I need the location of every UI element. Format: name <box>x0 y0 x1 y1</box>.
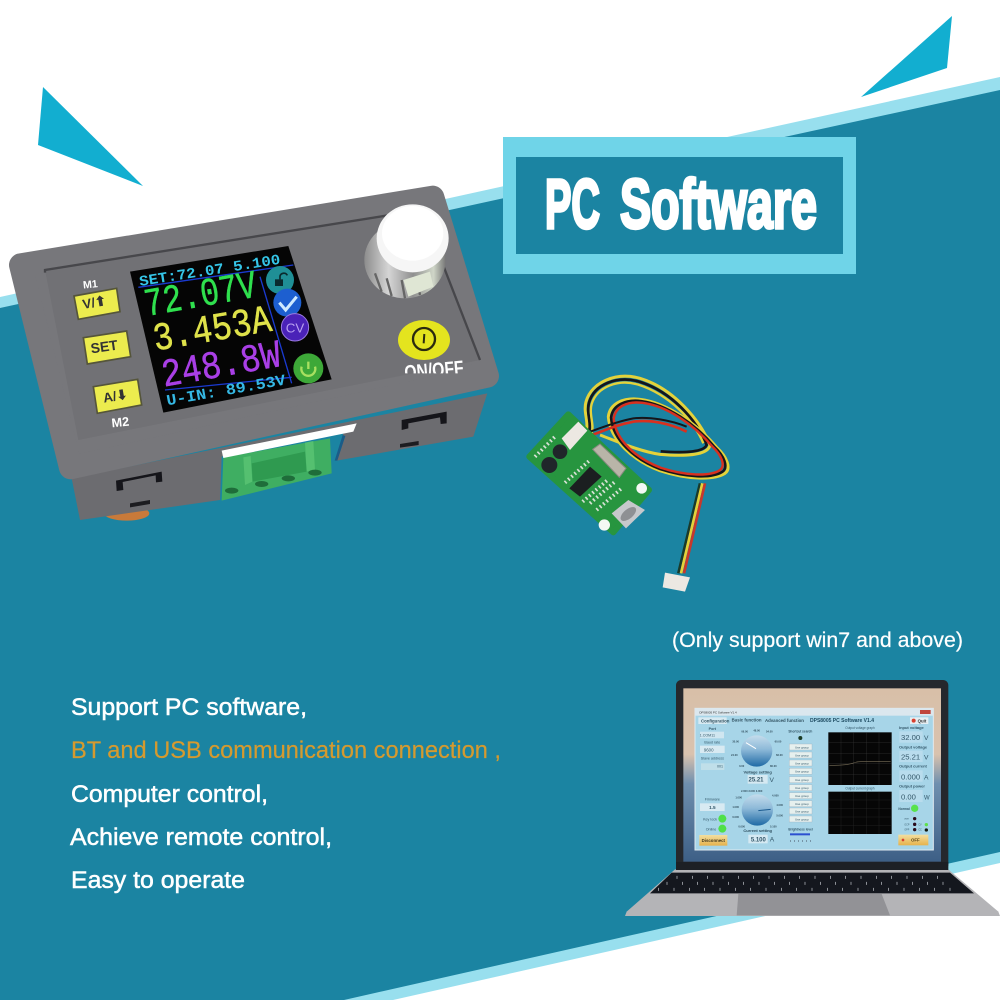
cable outer loop <box>575 376 710 455</box>
current dial: 1.000 <box>732 805 740 809</box>
small components <box>541 457 557 473</box>
readings column: Input voltage <box>899 725 925 730</box>
preset column: Use group <box>795 802 809 806</box>
current dial: 2.000 3.000 3.000 <box>741 789 763 793</box>
voltage dial <box>731 728 783 784</box>
voltage dial: 30.00 <box>732 739 740 743</box>
cable socket <box>562 422 587 450</box>
power readout: 248.8W <box>158 333 285 398</box>
icon: lock <box>266 266 294 294</box>
icon: power on <box>293 353 323 383</box>
button SET <box>83 331 131 364</box>
icon: CV <box>281 314 309 341</box>
window close button <box>920 710 931 714</box>
off button: OFF <box>911 838 920 843</box>
disconnect button: Disconnect <box>702 838 726 843</box>
device: digital power supply module <box>21 197 487 521</box>
window title: DPS8005 PC Software V1.4 <box>699 711 737 715</box>
preset column: Use group <box>795 761 809 765</box>
readings column <box>899 725 930 802</box>
readings column: V <box>924 754 929 761</box>
clip slot left <box>116 472 162 507</box>
feature line 1: Support PC software, <box>71 694 307 721</box>
micro USB port <box>612 500 645 528</box>
decorative triangle left <box>38 87 143 186</box>
current dial: 4.000 <box>776 803 784 807</box>
voltage dial: 0.00 <box>739 764 745 768</box>
current graph <box>828 786 892 834</box>
voltage dial: 80.00 <box>770 764 777 768</box>
title box <box>503 137 856 274</box>
left column: Slave address <box>701 756 724 760</box>
voltage dial: 60.00 <box>775 739 782 743</box>
tabs <box>698 717 804 724</box>
current graph: Output current graph <box>845 786 875 790</box>
button V up: V/⬆ <box>81 293 107 312</box>
left column: 1.COM11 <box>700 733 715 737</box>
readings column: 0.000 <box>901 772 920 781</box>
preset column: Use group <box>795 817 809 821</box>
crystal <box>593 444 626 477</box>
left column: 001 <box>717 765 723 769</box>
laptop base <box>625 869 1000 916</box>
voltage graph: Output voltage graph <box>845 726 875 730</box>
keyboard <box>650 873 974 893</box>
protection indicators: OCP <box>904 824 910 826</box>
readings column: V <box>924 735 929 742</box>
voltage dial: 24.00 <box>731 753 738 757</box>
button SET: SET <box>90 337 119 356</box>
protection indicators: over <box>904 818 909 821</box>
readings column: 32.00 <box>901 733 920 742</box>
left column: 9600 <box>704 748 714 753</box>
status lights <box>718 815 726 833</box>
voltage dial: Voltage setting <box>744 769 772 774</box>
current dial: Current setting <box>743 828 773 833</box>
voltage dial: 54.00 <box>766 730 773 734</box>
on/off button <box>398 320 450 360</box>
readings column: 0.00 <box>901 792 916 801</box>
on/off label: ON/OFF <box>404 357 465 384</box>
preset column: Use group <box>795 809 809 813</box>
lower bezel <box>676 862 948 870</box>
icon: check <box>273 289 301 317</box>
feature list <box>70 694 501 894</box>
voltage graph <box>828 726 892 785</box>
current dial: 0.000 <box>732 815 740 819</box>
current dial: 4.000 <box>772 794 779 798</box>
current dial: A <box>770 836 775 843</box>
laptop <box>625 680 1000 916</box>
recess top shadow <box>45 210 480 360</box>
chip <box>569 467 602 497</box>
left column: Key lock <box>703 817 717 821</box>
readings column: 25.21 <box>901 752 920 761</box>
tabs: Basic function <box>732 718 762 723</box>
left column: Port <box>709 727 717 731</box>
caption: (Only support win7 and above) <box>672 628 963 652</box>
readings column: W <box>924 795 930 801</box>
front bezel <box>21 197 487 468</box>
software window <box>695 708 933 850</box>
title box: PC <box>545 165 600 243</box>
left column: Online <box>706 827 716 831</box>
tabs: Configuration <box>701 718 730 723</box>
button A down: A/⬇ <box>102 387 129 406</box>
voltage readout: 72.07V <box>141 264 261 328</box>
left column: Baud rate <box>704 741 720 745</box>
button A down <box>93 379 142 413</box>
feature line 2: BT and USB communication connection , <box>71 737 501 764</box>
clip slot right <box>400 412 447 448</box>
feature line 5: Easy to operate <box>71 867 245 894</box>
protection indicators: OPP <box>904 830 910 832</box>
normal status <box>898 805 918 812</box>
current dial: 1.000 <box>735 796 743 800</box>
readings column: Output power <box>899 783 925 788</box>
label M2: M2 <box>111 415 130 430</box>
feature line 4: Achieve remote control, <box>70 824 332 851</box>
current dial: 5.100 <box>751 837 766 843</box>
voltage dial: 66.00 <box>776 753 783 757</box>
mounting holes <box>636 483 647 494</box>
voltage dial: 25.21 <box>749 778 764 784</box>
device body <box>72 393 487 520</box>
current dial: 0.000 <box>738 824 746 828</box>
wallpaper <box>683 688 941 862</box>
disconnect button <box>699 835 727 846</box>
label M1: M1 <box>82 278 98 292</box>
button V up <box>74 288 120 319</box>
preset column: Shortcut search <box>788 729 812 733</box>
icon: CV: CV <box>286 320 304 335</box>
voltage dial: V <box>769 777 774 784</box>
protection indicators: CC <box>918 830 922 832</box>
tail connector <box>663 573 690 592</box>
recess panel <box>45 210 480 440</box>
readings column: A <box>924 774 929 781</box>
title box: Software <box>620 165 817 243</box>
tabs: Advanced function <box>765 718 804 723</box>
feature line 3: Computer control, <box>71 781 268 808</box>
set readout: SET:72.07 5.100 <box>138 253 282 291</box>
decorative triangle right <box>861 16 952 97</box>
current dial: 5.000 <box>776 814 784 818</box>
left column: Firmware <box>705 797 720 801</box>
brightness control <box>788 828 813 841</box>
left column: 1.5 <box>709 805 716 810</box>
orange part under body <box>104 506 149 521</box>
preset column: Use group <box>795 753 809 757</box>
terminal block <box>222 423 357 501</box>
trackpad <box>737 894 890 915</box>
protection indicators: CV <box>918 825 922 827</box>
software heading: DPS8005 PC Software V1.4 <box>810 718 874 724</box>
quit button <box>910 717 928 724</box>
current readout: 3.453A <box>150 298 275 362</box>
rotary knob <box>364 204 449 298</box>
preset column: Use group <box>795 770 809 774</box>
preset column <box>788 729 812 822</box>
current dial: 5.100 <box>770 824 777 828</box>
readings column: Output voltage <box>899 744 928 749</box>
preset column: Use group <box>795 786 809 790</box>
current dial <box>732 789 784 843</box>
off button <box>898 835 928 845</box>
preset column: Use group <box>795 778 809 782</box>
display screen <box>130 246 332 413</box>
circuit board <box>529 414 649 532</box>
preset column: Use group <box>795 745 809 749</box>
cable tail <box>678 483 705 573</box>
protection indicators <box>904 817 928 832</box>
normal status: Normal <box>898 807 910 811</box>
cable inner loop <box>572 399 728 478</box>
lid <box>676 680 948 870</box>
voltage dial: 48.00 <box>753 728 761 732</box>
preset column: Use group <box>795 794 809 798</box>
brightness control: Brightness level <box>788 828 813 832</box>
quit button: Quit <box>918 718 927 723</box>
readings column: Output current <box>899 764 928 769</box>
left column <box>700 727 725 831</box>
USB adapter module with cable <box>529 376 728 592</box>
input voltage readout: U-IN: 89.53V <box>165 371 288 410</box>
voltage dial: 06.00 <box>741 730 749 734</box>
display divider lines <box>138 265 293 390</box>
